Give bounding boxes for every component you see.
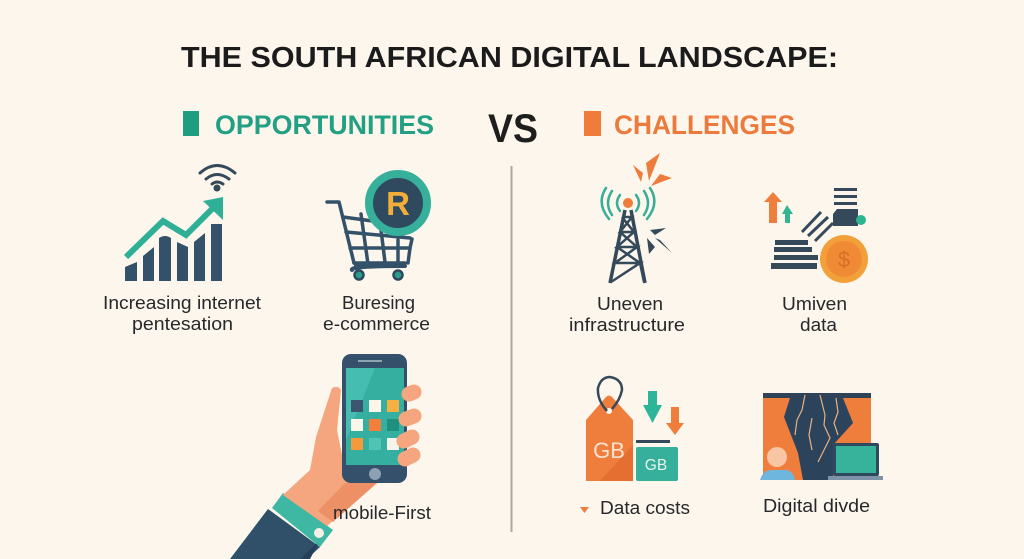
label: uneven infrastructure: infrastructure bbox=[569, 315, 685, 335]
panel: opportunities bbox=[103, 166, 431, 559]
icon: GB price tags with arrows: GB bbox=[645, 457, 667, 474]
label: increasing internet penetration: pentesation bbox=[132, 314, 233, 334]
icon: hand holding phone bbox=[230, 354, 414, 559]
label: data costs: Data costs bbox=[600, 498, 690, 518]
icon: GB price tags with arrows: GB bbox=[593, 438, 625, 463]
label: digital divide: Digital divde bbox=[763, 496, 870, 516]
icon: growth chart with wifi bbox=[125, 166, 235, 281]
label: uneven data: data bbox=[800, 315, 838, 335]
icon: digital divide bbox=[760, 393, 883, 480]
label: mobile-first: mobile-First bbox=[333, 503, 431, 523]
icon: shopping cart with rand coin bbox=[327, 174, 427, 280]
label: uneven data: Umiven bbox=[782, 294, 847, 314]
icon: GB price tags with arrows bbox=[586, 377, 684, 481]
label: increasing internet penetration: Increasing internet bbox=[103, 293, 261, 313]
label: e-commerce: Buresing bbox=[342, 293, 415, 313]
panel: challenges bbox=[569, 153, 883, 518]
label: uneven infrastructure bbox=[569, 294, 685, 335]
icon: shopping cart with rand coin: R bbox=[386, 185, 410, 222]
label: uneven infrastructure: Uneven bbox=[597, 294, 663, 314]
vs label: VS bbox=[488, 107, 538, 151]
heading: opportunities: OPPORTUNITIES bbox=[215, 110, 434, 140]
heading: challenges: CHALLENGES bbox=[614, 110, 795, 140]
icon: data stacks, arrows and coin bbox=[764, 188, 868, 283]
icon: cell tower with broken signal bbox=[602, 153, 672, 283]
label: uneven data bbox=[782, 294, 847, 335]
label: e-commerce bbox=[323, 293, 430, 334]
title: THE SOUTH AFRICAN DIGITAL LANDSCAPE: bbox=[181, 42, 838, 74]
icon: data stacks, arrows and coin: $ bbox=[838, 247, 850, 272]
label: e-commerce: e-commerce bbox=[323, 314, 430, 334]
label: increasing internet penetration bbox=[103, 293, 261, 334]
